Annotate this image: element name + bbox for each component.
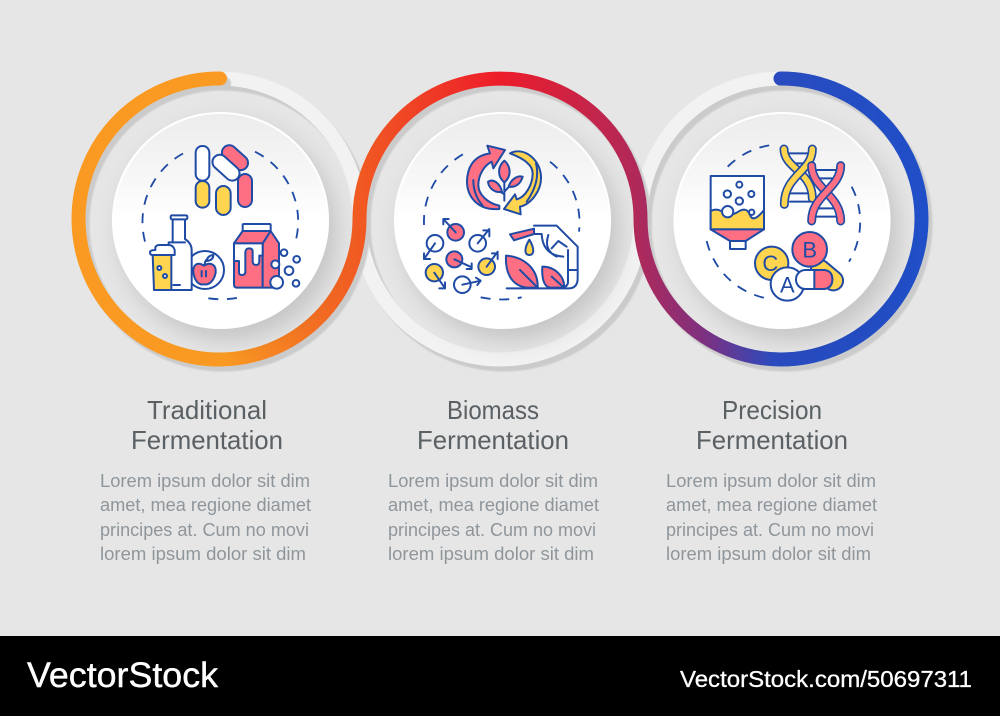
disc 2 bbox=[395, 113, 610, 328]
column 1 text bbox=[100, 470, 311, 564]
column 2 text: principes at. Cum no movi bbox=[388, 519, 596, 540]
footer logo: VectorStock bbox=[27, 656, 219, 695]
column 3 text bbox=[666, 470, 877, 564]
column 1 text: amet, mea regione diamet bbox=[100, 494, 311, 515]
column 3 text: lorem ipsum dolor sit dim bbox=[666, 543, 871, 564]
icon: precision fermentation: B bbox=[802, 237, 817, 262]
column 3 text: principes at. Cum no movi bbox=[666, 519, 874, 540]
column 3 text: amet, mea regione diamet bbox=[666, 494, 877, 515]
column 2 text: Lorem ipsum dolor sit dim bbox=[388, 470, 598, 491]
column 1 heading: Traditional bbox=[147, 395, 267, 425]
column 1 heading: Fermentation bbox=[131, 425, 283, 455]
coloured ribbon shadow bbox=[83, 83, 925, 364]
column 1 heading bbox=[131, 395, 283, 455]
column 3 heading: Precision bbox=[722, 395, 822, 425]
icon: traditional fermentation bbox=[142, 142, 300, 299]
column 1 text: Lorem ipsum dolor sit dim bbox=[100, 470, 310, 491]
column 3 text: Lorem ipsum dolor sit dim bbox=[666, 470, 876, 491]
column 1 text: principes at. Cum no movi bbox=[100, 519, 309, 540]
coloured ribbon bbox=[79, 78, 921, 359]
disc 3 bbox=[674, 113, 890, 328]
icon: biomass fermentation bbox=[424, 146, 580, 299]
column 2 text: amet, mea regione diamet bbox=[388, 494, 599, 515]
disc 1 bbox=[113, 113, 328, 328]
column 2 heading: Fermentation bbox=[417, 425, 569, 455]
icon: precision fermentation: C bbox=[762, 251, 778, 276]
column 2 text bbox=[388, 470, 599, 564]
icon: precision fermentation: A bbox=[780, 272, 795, 297]
column 2 text: lorem ipsum dolor sit dim bbox=[388, 543, 594, 564]
column 1 text: lorem ipsum dolor sit dim bbox=[100, 543, 306, 564]
footer url: VectorStock.com/50697311 bbox=[680, 666, 972, 692]
light ring segments bbox=[220, 78, 780, 359]
icon: precision fermentation bbox=[707, 145, 860, 301]
column 3 heading: Fermentation bbox=[696, 425, 848, 455]
footer bar bbox=[0, 636, 1000, 716]
column 2 heading: Biomass bbox=[447, 395, 539, 425]
column 2 heading bbox=[417, 395, 569, 455]
ring shadows bbox=[224, 84, 784, 364]
column 3 heading bbox=[696, 395, 848, 455]
